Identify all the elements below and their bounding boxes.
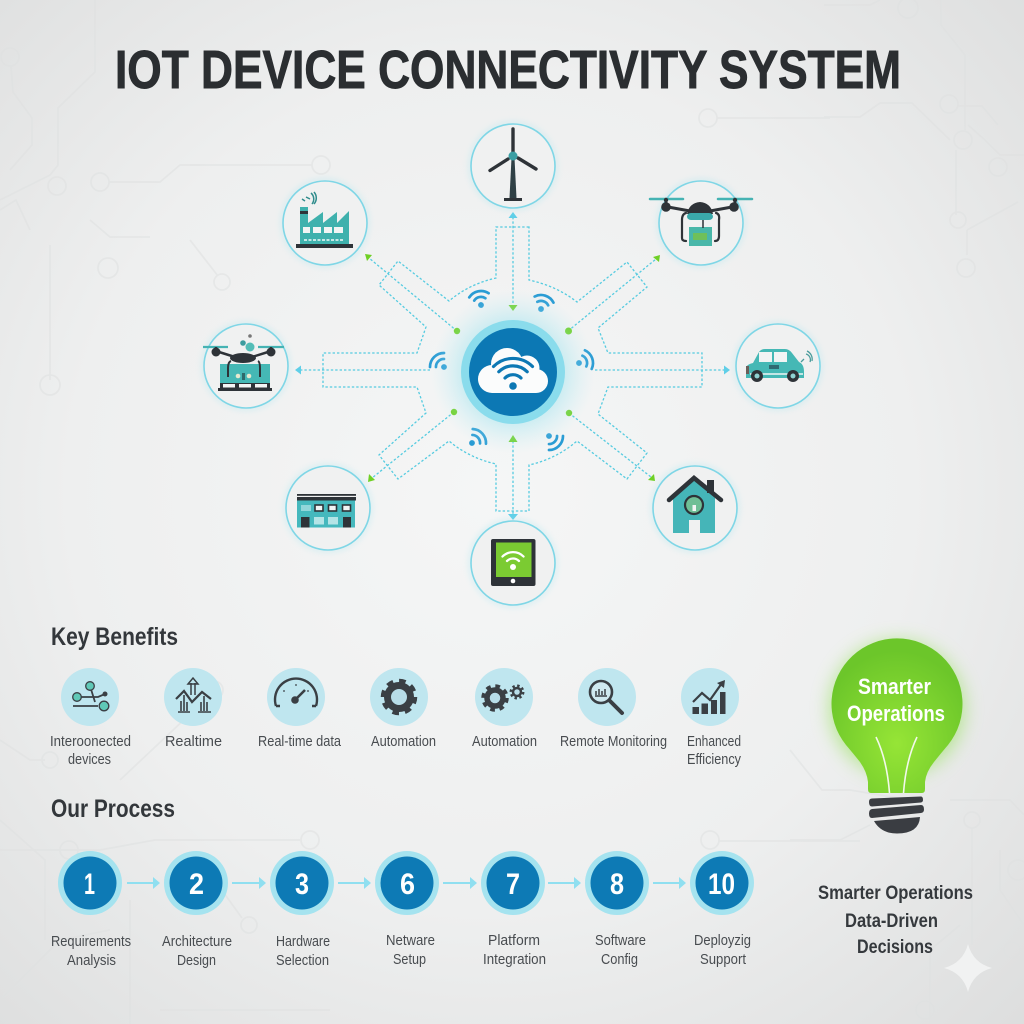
process step 10 (690, 851, 754, 968)
takeaway text: Data-Driven (845, 911, 938, 932)
hub connection network (295, 212, 730, 520)
dotted arrow: upper right (565, 255, 660, 334)
takeaway text (818, 883, 973, 958)
process step 1 (51, 851, 131, 969)
benefit: automation gears (472, 668, 537, 750)
arrow 8 to 10 (653, 877, 686, 889)
process step 8: 8 (610, 868, 624, 901)
benefit: real-time data (258, 668, 342, 750)
light bulb: smarter operations (829, 638, 965, 834)
takeaway text: Decisions (857, 937, 933, 958)
process step 2: Design (177, 952, 216, 969)
process step 2: 2 (189, 868, 204, 901)
device: factory (279, 177, 371, 269)
process step 1: Requirements (51, 933, 131, 950)
process step 7 (481, 851, 546, 968)
device: drone with pallet (200, 320, 292, 412)
process step 8: Config (601, 951, 638, 968)
device: commercial building (282, 462, 374, 554)
process step 10: Support (700, 951, 747, 968)
benefit: automation gear (370, 668, 436, 750)
dotted arrow: up (508, 212, 518, 311)
dotted arrow: lower right (566, 410, 655, 481)
dotted arrow: down (508, 435, 518, 520)
device: tablet (467, 517, 559, 609)
process step 3 (270, 851, 334, 969)
process step 7: 7 (506, 868, 520, 901)
process step 1: 1 (84, 868, 95, 901)
device: wind turbine (467, 120, 559, 212)
benefit: automation gears: Automation (472, 733, 537, 750)
dotted arrow: upper left (365, 254, 460, 334)
dashed gear outline (323, 227, 702, 511)
benefit: enhanced efficiency (681, 668, 741, 768)
wifi signal icons (427, 289, 596, 453)
benefit: enhanced efficiency: Enhanced (687, 733, 741, 750)
process step 10: Deployzig (694, 932, 751, 949)
benefit: realtime (164, 668, 222, 750)
benefit: remote monitoring: Remote Monitoring (560, 733, 667, 750)
process step 6: 6 (400, 868, 415, 901)
device: delivery drone right (650, 177, 752, 269)
process step 2 (162, 851, 232, 969)
heading: our process: Our Process (51, 795, 175, 823)
process step 3: 3 (295, 868, 309, 901)
central cloud hub (431, 290, 595, 454)
takeaway text: Smarter Operations (818, 883, 973, 904)
process step 7: Integration (483, 951, 546, 968)
benefit: enhanced efficiency: Efficiency (687, 751, 741, 768)
heading: key benefits: Key Benefits (51, 623, 178, 651)
dotted arrow: right (595, 366, 730, 374)
process step 10: 10 (708, 868, 735, 901)
device: connected car (732, 320, 824, 412)
process step 8 (585, 851, 649, 968)
process step 1: Analysis (67, 952, 116, 969)
benefit: real-time data: Real-time data (258, 733, 342, 750)
process step 6: Setup (393, 951, 426, 968)
device: smart home (649, 462, 741, 554)
arrow 1 to 2 (127, 877, 160, 889)
process step 2: Architecture (162, 933, 232, 950)
sparkle mark (944, 944, 992, 992)
arrow 2 to 3 (232, 877, 266, 889)
dotted arrow: lower left (368, 409, 457, 482)
benefit: realtime: Realtime (165, 733, 222, 750)
benefit: interconnected devices (50, 668, 131, 768)
benefit: interconnected devices: Interoonected (50, 733, 131, 750)
benefit: remote monitoring (560, 668, 667, 750)
light bulb: smarter operations: Smarter (858, 674, 931, 699)
arrow 3 to 6 (338, 877, 371, 889)
process step 8: Software (595, 932, 646, 949)
benefit: interconnected devices: devices (68, 751, 111, 768)
process step 7: Platform (488, 932, 540, 949)
process step 3: Hardware (276, 933, 330, 950)
process step 6 (375, 851, 439, 968)
arrow 7 to 8 (548, 877, 581, 889)
light bulb: smarter operations: Operations (847, 701, 945, 726)
process step 3: Selection (276, 952, 329, 969)
benefit: automation gear: Automation (371, 733, 436, 750)
arrow 6 to 7 (443, 877, 477, 889)
dotted arrow: left (295, 366, 430, 374)
process step 6: Netware (386, 932, 435, 949)
